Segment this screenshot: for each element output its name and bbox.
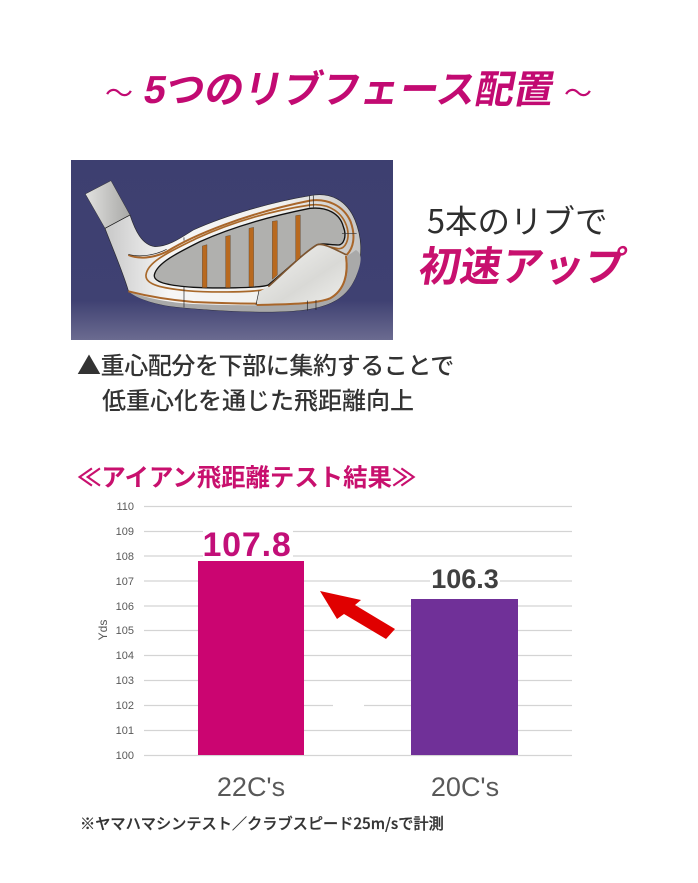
recess orange outline [146, 205, 348, 292]
bar: 22C's [198, 561, 304, 755]
y axis labels: 107 [116, 576, 134, 588]
value: 107.8: 107.8 [202, 526, 292, 564]
y axis labels: 103 [116, 675, 134, 687]
bar chart [96, 501, 572, 802]
y axis labels: 106 [116, 601, 134, 613]
description text [77, 346, 454, 416]
title left tilde: ～ [105, 72, 133, 112]
description text: ▲重心配分を下部に集約することで [77, 346, 454, 381]
y axis labels: 104 [116, 650, 134, 662]
y axis labels: 102 [116, 700, 134, 712]
bar: 20C's [411, 599, 518, 755]
callout: five ribs: 5本のリブで [427, 196, 608, 243]
y axis labels: 110 [116, 501, 134, 513]
arrow [320, 591, 395, 639]
orange outer line top [128, 200, 353, 258]
value: 106.3: 106.3 [431, 564, 499, 594]
y axis labels [116, 501, 134, 762]
description text: 低重心化を通じた飛距離向上 [102, 381, 414, 416]
category label: 22C's: 22C's [217, 772, 285, 802]
chart heading: ≪アイアン飛距離テスト結果≫ [77, 465, 416, 492]
y axis labels: 105 [116, 625, 134, 637]
hosel [85, 181, 130, 228]
face plate lower right [257, 244, 347, 305]
title right tilde: ～ [564, 72, 592, 112]
head body [105, 195, 361, 312]
y axis labels: 101 [116, 725, 134, 737]
rear gray band [128, 250, 361, 312]
illustration: iron club head with five ribs [71, 160, 393, 340]
callout: initial speed up: 初速アップ [416, 244, 629, 290]
title main text: 5つのリブフェース配置 [140, 69, 558, 112]
ribs [202, 215, 300, 288]
category label: 20C's: 20C's [431, 772, 499, 802]
y axis labels: 108 [116, 551, 134, 563]
y axis labels: 100 [116, 750, 134, 762]
title [105, 69, 592, 112]
footnote: ※ヤマハマシンテスト／クラブスピード25m/sで計測 [80, 812, 444, 834]
y axis title: Yds [96, 620, 110, 640]
y axis labels: 109 [116, 526, 134, 538]
inner recess [154, 208, 345, 288]
seams [105, 196, 316, 311]
